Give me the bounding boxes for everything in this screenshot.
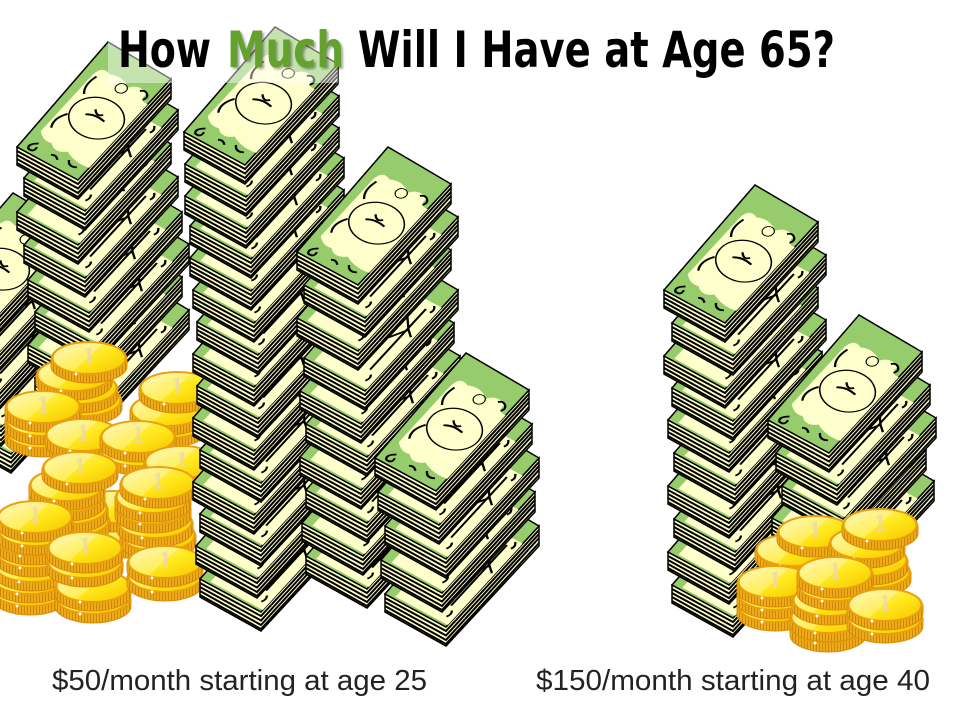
coin pile: left bbox=[0, 341, 220, 623]
coin pile: left: 1 bbox=[176, 447, 188, 474]
money stack: fourth bbox=[375, 353, 539, 646]
coin pile: left: 1 bbox=[37, 392, 49, 419]
title bbox=[118, 21, 835, 79]
coin pile: left: 1 bbox=[83, 343, 95, 370]
money stack: right short bbox=[768, 315, 936, 601]
money stack: far left, clipped bbox=[0, 193, 104, 473]
coin pile: left: 1 bbox=[74, 453, 86, 480]
coin pile: right bbox=[737, 508, 923, 652]
coin pile: left: 1 bbox=[132, 422, 144, 449]
coin pile: right: 1 bbox=[829, 558, 841, 585]
title: Will I Have at Age 65? bbox=[358, 21, 835, 79]
coin pile: left: 1 bbox=[171, 373, 183, 400]
title: Much bbox=[227, 21, 344, 79]
caption: right scenario: $150/month starting at age 40 bbox=[536, 665, 930, 697]
caption: left scenario: $50/month starting at age 25 bbox=[52, 665, 427, 697]
coin pile: right: 1 bbox=[879, 590, 891, 617]
coin pile: left: 1 bbox=[159, 547, 171, 574]
coin pile: left: 1 bbox=[79, 533, 91, 560]
coin pile: left: 1 bbox=[77, 420, 89, 447]
money stack: right tall bbox=[664, 185, 828, 637]
coin pile: left: 1 bbox=[29, 502, 41, 529]
coin pile: left: 1 bbox=[152, 468, 164, 495]
money stack: left tall bbox=[17, 42, 189, 430]
title: How bbox=[118, 21, 211, 79]
coin pile: right: 1 bbox=[809, 517, 821, 544]
money stack: second tall bbox=[184, 27, 354, 631]
money stack: third bbox=[297, 147, 460, 608]
coin pile: right: 1 bbox=[769, 567, 781, 594]
title backing fade bbox=[108, 20, 338, 83]
coin pile: right: 1 bbox=[874, 510, 886, 537]
